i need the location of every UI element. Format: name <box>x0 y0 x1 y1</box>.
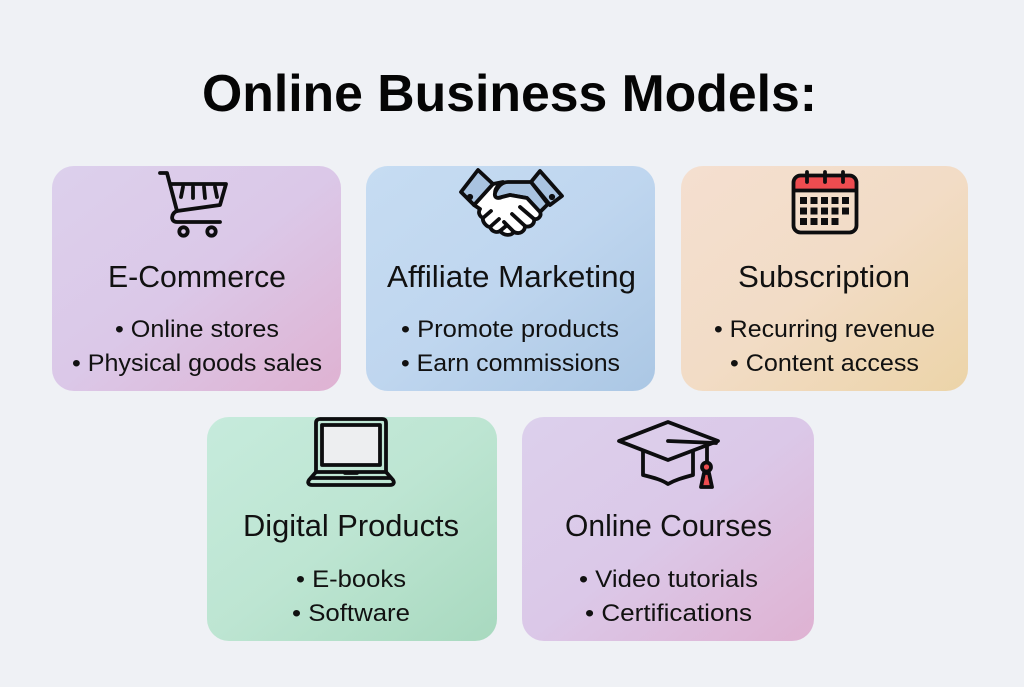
bullet list: e-commerce: • Online stores <box>115 316 279 343</box>
icon: calendar <box>794 172 856 232</box>
bullet list: subscription <box>714 316 935 377</box>
heading: e-commerce: E-Commerce <box>108 260 286 294</box>
heading: subscription: Subscription <box>738 260 910 294</box>
bullet list: subscription: • Content access <box>730 350 919 377</box>
bullet list: digital products <box>292 566 410 627</box>
heading: digital products: Digital Products <box>243 509 459 543</box>
panel: e-commerce <box>52 166 341 391</box>
bullet list: affiliate marketing: • Promote products <box>401 316 619 343</box>
bullet list: online courses: • Video tutorials <box>579 566 758 593</box>
panel: subscription <box>681 166 968 391</box>
bullet list: online courses <box>579 566 758 627</box>
bullet list: e-commerce: • Physical goods sales <box>72 350 322 377</box>
heading: online courses: Online Courses <box>565 509 772 543</box>
icon: handshake <box>461 170 562 235</box>
bullet list: online courses: • Certifications <box>585 600 752 627</box>
bullet list: digital products: • Software <box>292 600 410 627</box>
icon: graduation cap <box>619 422 718 487</box>
icon: shopping cart <box>160 173 226 236</box>
panel: affiliate marketing <box>366 166 655 391</box>
icon: laptop <box>308 419 394 485</box>
bullet list: digital products: • E-books <box>296 566 406 593</box>
bullet list: affiliate marketing: • Earn commissions <box>401 350 620 377</box>
panel: digital products <box>207 417 497 641</box>
bullet list: e-commerce <box>72 316 322 377</box>
heading: affiliate marketing: Affiliate Marketing <box>387 260 636 294</box>
bullet list: affiliate marketing <box>401 316 620 377</box>
panel: online courses <box>522 417 814 641</box>
bullet list: subscription: • Recurring revenue <box>714 316 935 343</box>
title: Online Business Models: <box>202 64 817 122</box>
